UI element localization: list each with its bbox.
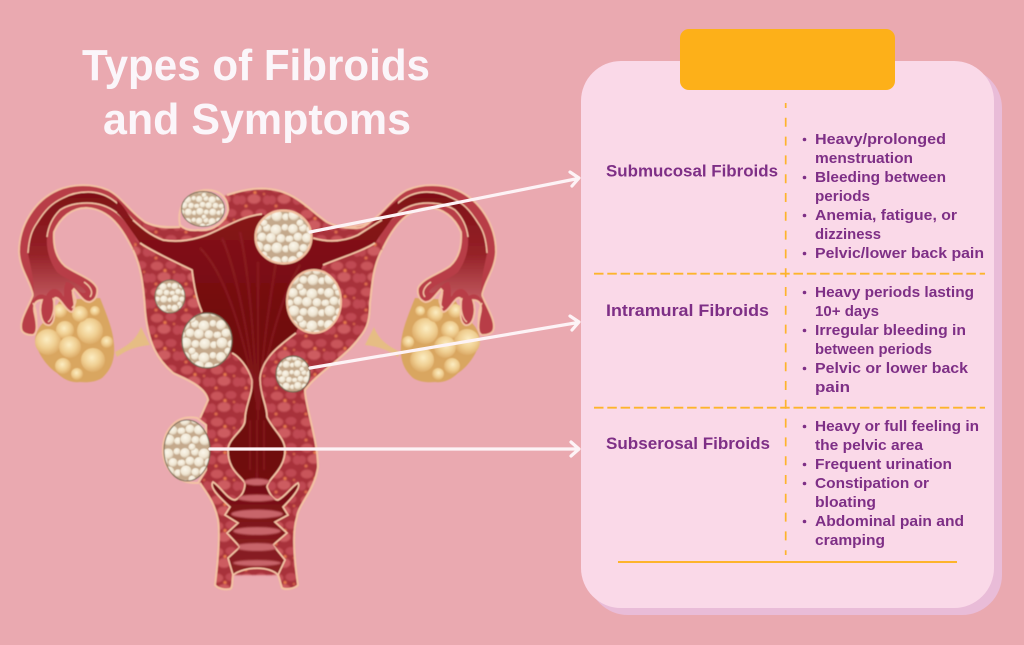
card body [581, 61, 994, 608]
uterus wall [133, 188, 382, 589]
fibroid: submucosal [256, 210, 312, 264]
row: submucosal fibroids: Heavy/prolonged [815, 131, 946, 148]
row: intramural fibroids: 10+ days [815, 303, 879, 320]
row: intramural fibroids [606, 284, 974, 396]
row: intramural fibroids: pain [815, 379, 850, 396]
row: intramural fibroids: between periods [815, 341, 932, 358]
row: submucosal fibroids: menstruation [815, 150, 913, 167]
fibroid: right large intramural [287, 270, 341, 333]
fibroid: lower subserosal [163, 417, 210, 483]
right fallopian tube and ovary [315, 185, 496, 382]
arrow: submucosal fibroid to row [310, 172, 579, 232]
row: subserosal fibroids [606, 418, 979, 549]
left fallopian tube and ovary [19, 185, 200, 382]
row: submucosal fibroids: Pelvic/lower back pain [815, 245, 984, 262]
fibroid: left small intramural [155, 280, 185, 313]
row: submucosal fibroids: Anemia, fatigue, or [815, 207, 957, 224]
title [82, 41, 430, 144]
row: submucosal fibroids: Bleeding between [815, 169, 946, 186]
row: subserosal fibroids: Subserosal Fibroids [606, 434, 770, 453]
arrow: intramural fibroid to row [310, 316, 579, 368]
panel: symptoms card [581, 29, 1002, 615]
row: subserosal fibroids: the pelvic area [815, 437, 924, 454]
title: Types of Fibroids [82, 41, 430, 90]
row: intramural fibroids: Heavy periods lasting [815, 284, 974, 301]
title: and Symptoms [103, 95, 411, 144]
row: intramural fibroids: Irregular bleeding in [815, 322, 966, 339]
row: submucosal fibroids [606, 131, 984, 262]
row: submucosal fibroids: Submucosal Fibroids [606, 162, 778, 180]
fibroid: right small intramural [276, 356, 310, 392]
row: subserosal fibroids: Abdominal pain and [815, 513, 964, 530]
table dividers [594, 103, 985, 562]
row: subserosal fibroids: Heavy or full feeling in [815, 418, 979, 435]
row: subserosal fibroids: cramping [815, 532, 885, 549]
card shadow [588, 68, 1002, 615]
row: subserosal fibroids: bloating [815, 494, 876, 511]
row: submucosal fibroids: periods [815, 188, 870, 205]
uterine cavity [117, 200, 398, 575]
fibroid: left large intramural [182, 313, 232, 368]
row: submucosal fibroids: dizziness [815, 226, 881, 243]
fibroid: top subserosal [179, 190, 228, 230]
row: subserosal fibroids: Frequent urination [815, 456, 952, 473]
arrow: subserosal fibroid to row [210, 442, 579, 456]
orange header tab [680, 29, 895, 90]
illustration: uterus with fibroids [19, 185, 496, 589]
row: intramural fibroids: Pelvic or lower back [815, 360, 969, 377]
row: intramural fibroids: Intramural Fibroids [606, 301, 769, 320]
row: subserosal fibroids: Constipation or [815, 475, 929, 492]
